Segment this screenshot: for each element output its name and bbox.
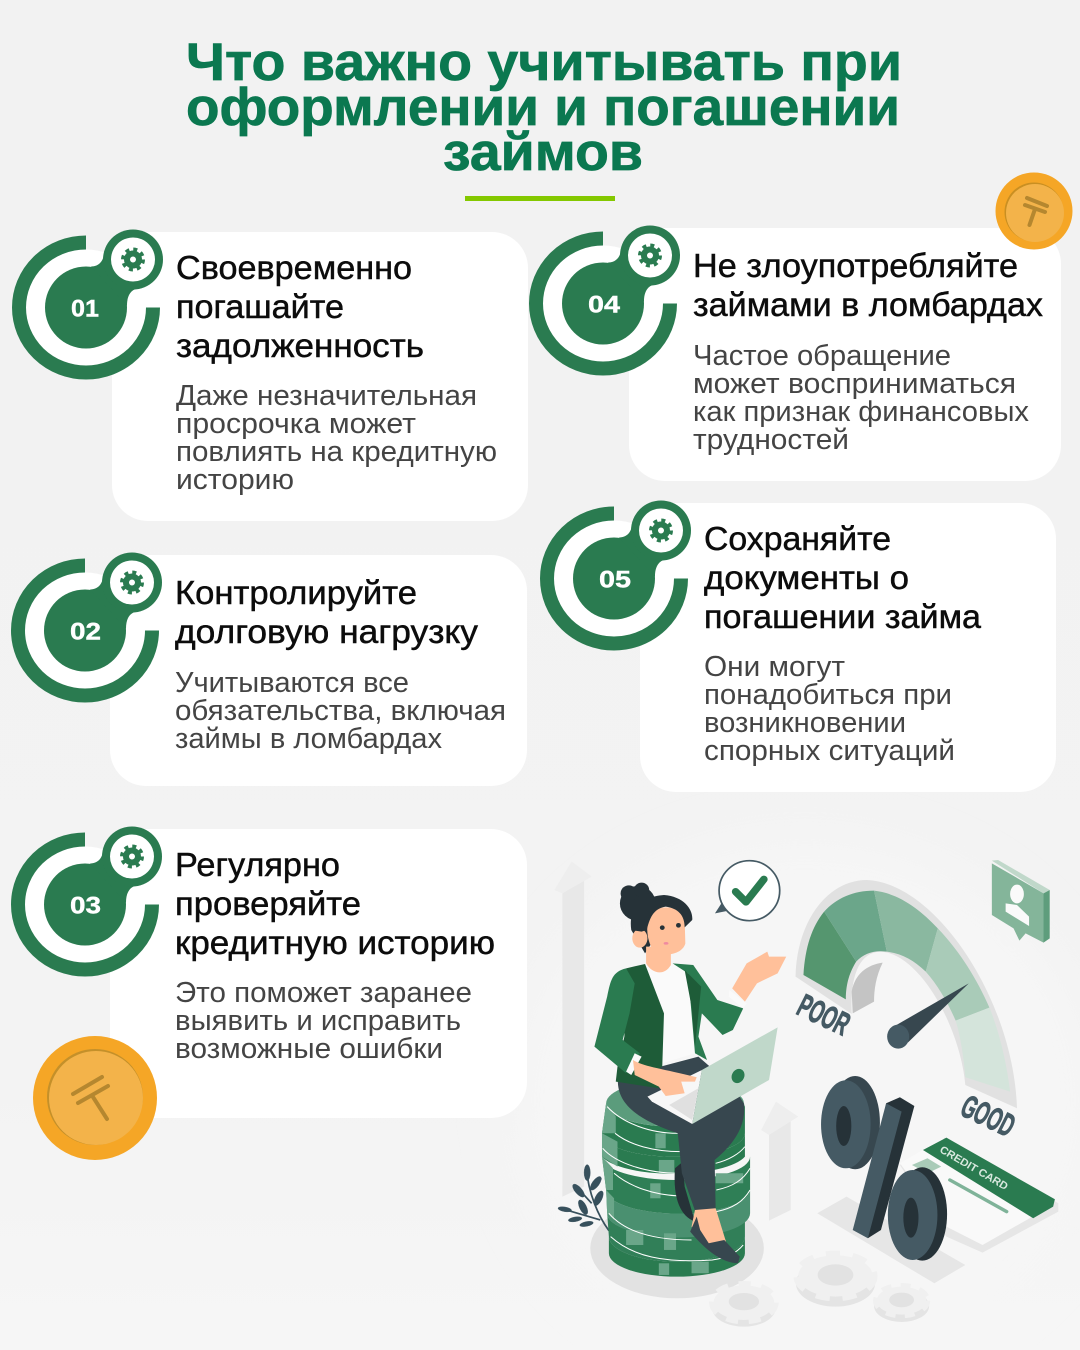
card 1 heading: Своевременно bbox=[176, 249, 412, 286]
title: займов bbox=[443, 123, 643, 182]
shirt bbox=[645, 963, 695, 1063]
card 4 heading bbox=[693, 247, 1044, 323]
gauge needle bbox=[887, 983, 969, 1049]
card 4 text: может восприниматься bbox=[693, 368, 1016, 400]
card 3 text: возможные ошибки bbox=[175, 1033, 443, 1065]
icon: tenge coin top right bbox=[996, 172, 1072, 250]
profile message icon bbox=[992, 860, 1050, 943]
coin stack bbox=[602, 1080, 750, 1277]
card 2 heading: Контролируйте bbox=[175, 574, 417, 611]
card 1 text: повлиять на кредитную bbox=[176, 436, 497, 468]
card 3 heading: Регулярно bbox=[175, 846, 340, 883]
card 1 text: историю bbox=[176, 464, 294, 496]
icon: badge 05 bbox=[547, 500, 691, 644]
icon: badge 03: 03 bbox=[70, 892, 101, 920]
card 4 text: Частое обращение bbox=[693, 340, 951, 372]
card 2 heading: долговую нагрузку bbox=[175, 613, 479, 650]
card 3 text: Это поможет заранее bbox=[175, 977, 472, 1009]
credit card bbox=[900, 1138, 1058, 1253]
card 5 heading: Сохраняйте bbox=[704, 520, 891, 557]
icon: badge 01: 01 bbox=[71, 296, 99, 322]
card 5 text: понадобиться при bbox=[704, 679, 952, 711]
title bbox=[186, 33, 902, 182]
speech bubble check bbox=[715, 861, 780, 921]
icon: badge 04: 04 bbox=[588, 292, 621, 318]
card 2 text bbox=[175, 667, 506, 755]
percent shadow bbox=[817, 1197, 965, 1283]
panel: card 1 bbox=[112, 232, 528, 521]
illustration: woman on coins with credit score gauge bbox=[554, 860, 1058, 1327]
card 4 text: трудностей bbox=[693, 424, 849, 456]
card 5 heading bbox=[704, 520, 982, 635]
percent sign bbox=[821, 1076, 947, 1261]
card 2 text: обязательства, включая bbox=[175, 695, 506, 727]
card 3 heading: проверяйте bbox=[175, 885, 361, 922]
card 5 text: спорных ситуаций bbox=[704, 735, 955, 767]
icon: badge 01 bbox=[19, 230, 163, 372]
icon: badge 03 bbox=[18, 826, 162, 970]
foot bbox=[692, 1208, 726, 1245]
card 2 heading bbox=[175, 574, 479, 650]
card 5 text bbox=[704, 651, 955, 767]
icon: badge 02 bbox=[18, 552, 162, 696]
card 5 heading: погашении займа bbox=[704, 598, 982, 635]
jacket bbox=[594, 963, 747, 1088]
card 3 heading: кредитную историю bbox=[175, 924, 495, 961]
title: Что важно учитывать при bbox=[186, 33, 902, 92]
card 3 heading bbox=[175, 846, 495, 961]
gauge: GOOD bbox=[955, 1088, 1021, 1144]
icon: badge 04 bbox=[536, 226, 680, 368]
laptop bbox=[647, 1027, 778, 1124]
card 5 text: возникновении bbox=[704, 707, 906, 739]
card 1 heading bbox=[176, 249, 424, 364]
card 1 text bbox=[176, 380, 497, 496]
neck and head bbox=[620, 883, 692, 972]
card 4 text: как признак финансовых bbox=[693, 396, 1029, 428]
back shoe bbox=[675, 1162, 695, 1222]
gauge bbox=[792, 880, 1021, 1144]
card 3 text: выявить и исправить bbox=[175, 1005, 461, 1037]
icon: badge 05: 05 bbox=[599, 566, 631, 594]
legs bbox=[618, 1057, 744, 1211]
icon: badge 02: 02 bbox=[70, 618, 101, 646]
card 4 text bbox=[693, 340, 1029, 456]
panel: card 2 bbox=[110, 555, 527, 786]
plant bbox=[558, 1165, 609, 1231]
card 2 text: Учитываются все bbox=[175, 667, 409, 699]
small arrow bbox=[761, 1102, 798, 1221]
panel: card 4 bbox=[629, 228, 1061, 481]
card 1 heading: погашайте bbox=[176, 288, 344, 325]
ground shadow bbox=[590, 1198, 764, 1298]
card 1 text: Даже незначительная bbox=[176, 380, 477, 412]
card 4 heading: Не злоупотребляйте bbox=[693, 247, 1018, 284]
panel: card 3 bbox=[110, 829, 527, 1118]
gears bbox=[712, 1255, 929, 1327]
card 5 heading: документы о bbox=[704, 559, 909, 596]
title: оформлении и погашении bbox=[186, 78, 900, 137]
credit card: CREDIT CARD bbox=[937, 1144, 1010, 1193]
card 5 text: Они могут bbox=[704, 651, 845, 683]
hand on laptop bbox=[633, 1060, 697, 1096]
card 1 text: просрочка может bbox=[176, 408, 416, 440]
card 2 text: займы в ломбардах bbox=[175, 723, 443, 755]
card 3 text bbox=[175, 977, 472, 1065]
front shoe bbox=[690, 1217, 740, 1263]
icon: tenge coin bottom left bbox=[33, 1036, 157, 1160]
gauge labels: POOR bbox=[792, 988, 856, 1042]
panel: card 5 bbox=[640, 503, 1056, 792]
big arrow bbox=[554, 862, 592, 1197]
card 1 heading: задолженность bbox=[176, 327, 424, 364]
card 4 heading: займами в ломбардах bbox=[693, 286, 1044, 323]
hand raised bbox=[732, 952, 786, 1002]
